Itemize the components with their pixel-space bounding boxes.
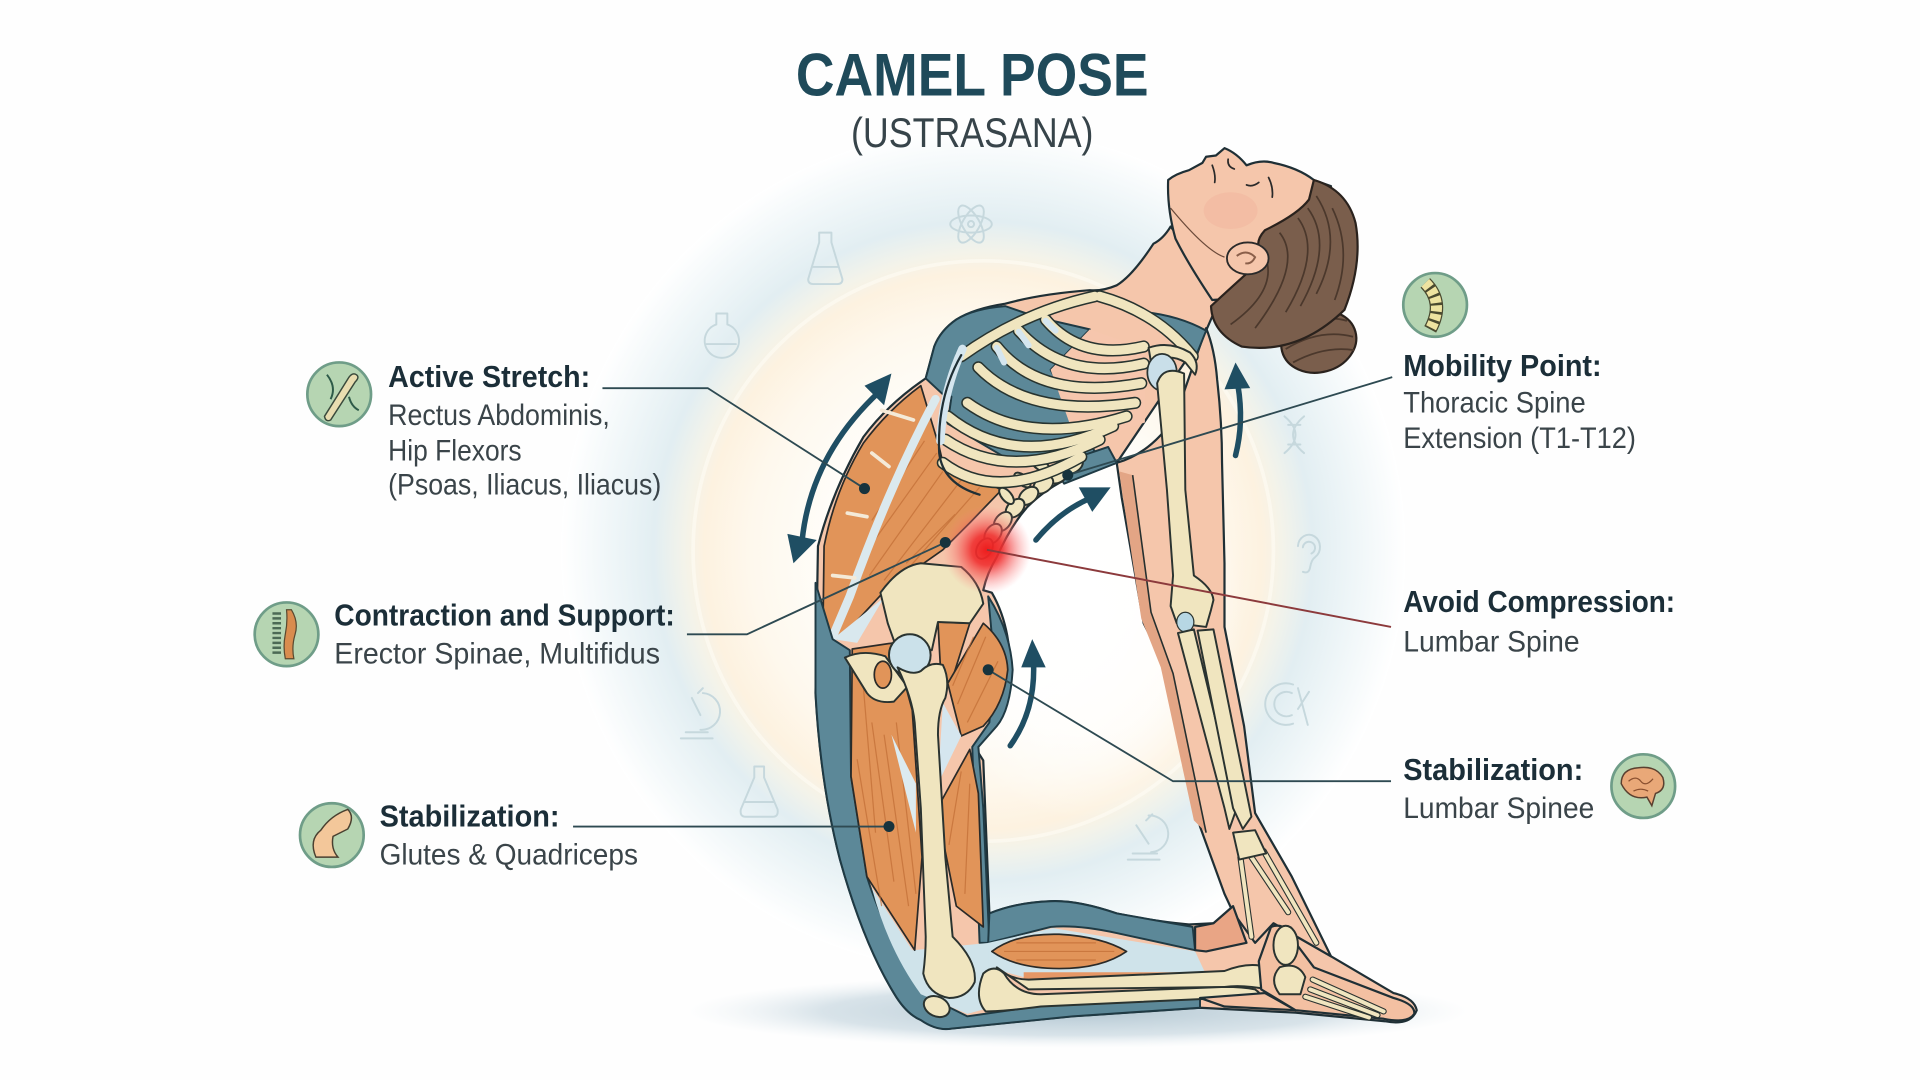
double arrow <box>787 373 891 563</box>
shin fascia <box>988 928 1206 977</box>
label: stabilization right <box>1403 753 1675 825</box>
knee fascia <box>872 888 994 1014</box>
label: mobility point: Mobility Point: <box>1403 349 1602 383</box>
label: avoid compression <box>1403 585 1675 658</box>
hair cap <box>1211 180 1358 348</box>
label: mobility point: Extension (T1-T12) <box>1403 422 1636 455</box>
hip band and thigh clothing <box>816 583 1200 1029</box>
subtitle: (USTRASANA) <box>851 109 1093 156</box>
shoulder blade <box>1149 345 1197 375</box>
hip joint <box>889 634 931 676</box>
humerus <box>1147 354 1213 632</box>
label: stabilization left: Glutes & Quadriceps <box>380 838 638 871</box>
arrow: hip <box>1010 639 1046 746</box>
shin bones <box>979 965 1273 1011</box>
peach chest panel <box>1051 329 1145 435</box>
arm <box>1117 328 1331 956</box>
rib cage <box>939 296 1193 495</box>
foot <box>1200 926 1414 1020</box>
label: stabilization left: Stabilization: <box>380 800 560 834</box>
upper top clothing <box>926 306 1206 484</box>
label: active stretch: Active Stretch: <box>388 360 590 394</box>
head <box>1168 148 1331 300</box>
label: stabilization right: Lumbar Spinee <box>1403 792 1594 825</box>
label: active stretch <box>307 360 661 502</box>
label: stabilization left <box>300 800 638 871</box>
label: avoid compression: Lumbar Spine <box>1403 625 1580 658</box>
faint science icons <box>681 202 1320 860</box>
icon: erector spinae <box>255 602 318 666</box>
pelvis <box>845 563 983 702</box>
femur <box>898 664 975 998</box>
body silhouette <box>816 227 1417 1029</box>
leader lines <box>573 377 1392 832</box>
label: contraction and support <box>255 599 675 671</box>
motion arrows <box>787 362 1250 746</box>
figure: woman in camel pose <box>816 148 1417 1029</box>
icon: brain <box>1611 754 1675 818</box>
patella <box>920 992 953 1021</box>
arrow: chest <box>1224 362 1250 456</box>
label: active stretch: Rectus Abdominis, <box>388 399 610 432</box>
label: contraction and support: Contraction and Support: <box>334 599 675 633</box>
arrow: belly <box>1036 487 1111 540</box>
label: contraction and support: Erector Spinae, Multifidus <box>334 638 660 671</box>
hair <box>1274 302 1363 381</box>
label: active stretch: Hip Flexors <box>388 434 522 467</box>
pain point burst <box>943 506 1031 594</box>
icon: knee <box>300 803 364 867</box>
lower spine <box>973 453 1086 562</box>
forearm bones <box>1178 629 1316 943</box>
calf skin <box>1195 906 1247 951</box>
label: active stretch: (Psoas, Iliacus, Iliacus) <box>388 469 661 502</box>
ear <box>1227 242 1269 274</box>
abdominal muscles <box>823 386 1002 643</box>
label: mobility point <box>1403 273 1636 455</box>
icon: stretched muscle <box>307 362 371 426</box>
leg muscles <box>851 622 1224 982</box>
label: stabilization right: Stabilization: <box>1403 753 1583 787</box>
title: CAMEL POSE <box>796 42 1149 109</box>
label: mobility point: Thoracic Spine <box>1403 387 1586 420</box>
icon: spine <box>1403 273 1467 337</box>
label: avoid compression: Avoid Compression: <box>1403 585 1675 619</box>
